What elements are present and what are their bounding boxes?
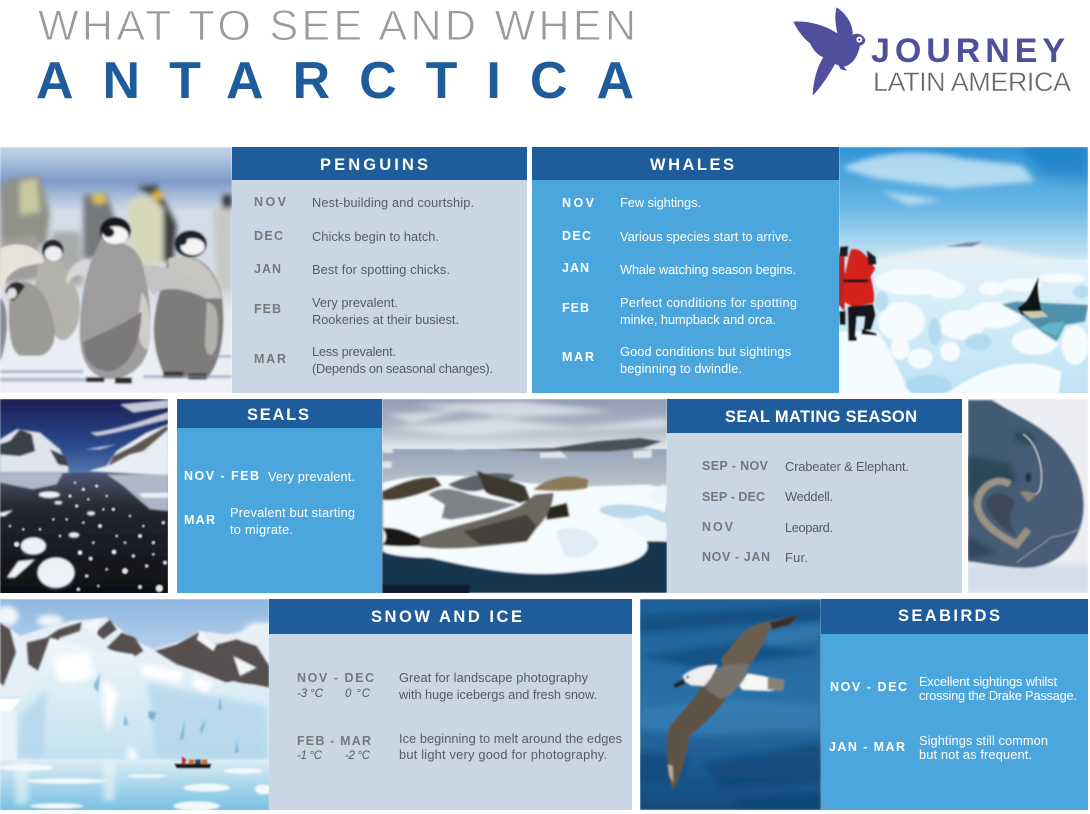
right flipper of main chick	[142, 265, 208, 299]
mating months and species: SEP - DEC	[702, 490, 765, 504]
whale months and notes: Good conditions but sightings	[620, 344, 791, 359]
photographer	[838, 257, 845, 312]
heading: snow and ice: SNOW AND ICE	[371, 608, 522, 626]
photo: iceberg	[0, 599, 277, 811]
right penguin	[154, 256, 223, 378]
far chick	[35, 257, 80, 340]
seal months and notes: to migrate.	[230, 522, 293, 537]
penguin months and notes: NOV	[254, 195, 287, 209]
mating months and species: NOV	[702, 520, 734, 534]
panel: seals	[177, 399, 382, 593]
photo: mountains and black water	[0, 399, 168, 594]
mating months and species: Weddell.	[785, 489, 833, 504]
snow and ice months, temperatures and notes: FEB - MAR	[297, 734, 371, 748]
icon: parrot	[793, 7, 865, 96]
heading: penguins	[232, 147, 527, 180]
penguin months and notes	[254, 195, 493, 376]
seabird months and notes: Excellent sightings whilst	[919, 674, 1057, 689]
photo: seal face	[967, 399, 1090, 593]
left small chick	[9, 282, 55, 356]
seabird months and notes: but not as frequent.	[919, 747, 1032, 762]
snow and ice months, temperatures and notes: NOV - DEC	[297, 671, 374, 685]
penguin months and notes: Rookeries at their busiest.	[312, 312, 459, 327]
penguin months and notes: (Depends on seasonal changes).	[312, 361, 493, 376]
seabird months and notes: crossing the Drake Passage.	[919, 688, 1077, 703]
snow and ice months, temperatures and notes: 0 °C	[345, 688, 371, 700]
mating months and species: Fur.	[785, 550, 808, 565]
whale months and notes: minke, humpback and orca.	[620, 312, 776, 327]
mating months and species: Leopard.	[785, 520, 833, 535]
photo: albatross over the sea	[640, 599, 821, 810]
whale months and notes: DEC	[562, 229, 591, 243]
panel: seabirds	[821, 599, 1088, 810]
panel: seal mating season	[667, 399, 962, 593]
title	[36, 2, 636, 110]
logo words: Latin America: LATIN AMERICA	[873, 67, 1071, 97]
title line: Antarctica: ANTARCTICA	[36, 52, 634, 110]
mating months and species: SEP - NOV	[702, 459, 769, 473]
seabird months and notes	[829, 674, 1077, 762]
whale months and notes: MAR	[562, 350, 594, 364]
seal months and notes	[184, 469, 355, 537]
photo: seals on ice floe	[382, 399, 667, 595]
penguin months and notes: JAN	[254, 262, 281, 276]
snow and ice months, temperatures and notes: with huge icebergs and fresh snow.	[398, 687, 597, 702]
heading: seals: SEALS	[247, 406, 309, 424]
snow and ice months, temperatures and notes: -1 °C	[297, 750, 323, 762]
whale months and notes: Whale watching season begins.	[620, 262, 796, 277]
heading: seabirds: SEABIRDS	[898, 607, 1000, 625]
photo: orca and photographer	[838, 145, 1090, 395]
whale months and notes: FEB	[562, 301, 589, 315]
seabird months and notes: JAN - MAR	[829, 740, 905, 754]
penguin months and notes: Best for spotting chicks.	[312, 262, 450, 277]
main chick	[80, 238, 151, 379]
logo: Journey Latin America	[793, 7, 1071, 97]
penguin months and notes: FEB	[254, 302, 281, 316]
heading: snow and ice	[269, 599, 632, 634]
penguin months and notes: Very prevalent.	[312, 295, 398, 310]
mating months and species	[702, 459, 909, 565]
snow and ice months, temperatures and notes: Ice beginning to melt around the edges	[399, 731, 622, 746]
penguin months and notes: Nest-building and courtship.	[312, 195, 474, 210]
penguin months and notes: DEC	[254, 229, 283, 243]
seal months and notes: Very prevalent.	[268, 469, 355, 484]
logo word: Journey: JOURNEY	[871, 32, 1065, 70]
mating months and species: Crabeater & Elephant.	[785, 459, 909, 474]
whale months and notes: Few sightings.	[620, 195, 701, 210]
snow and ice months, temperatures and notes	[297, 670, 622, 762]
whale months and notes: beginning to dwindle.	[620, 361, 742, 376]
heading: seal mating season	[667, 399, 962, 433]
whale months and notes: Perfect conditions for spotting	[620, 295, 797, 310]
seal months and notes: NOV - FEB	[184, 469, 259, 483]
heading: whales: WHALES	[650, 156, 734, 174]
left flipper	[0, 244, 44, 295]
heading: seal mating season: SEAL MATING SEASON	[725, 408, 917, 426]
whale months and notes: Various species start to arrive.	[620, 229, 792, 244]
seal months and notes: Prevalent but starting	[230, 505, 355, 520]
panel: penguins	[232, 147, 527, 393]
photo: penguins	[0, 147, 232, 393]
snow and ice months, temperatures and notes: but light very good for photography.	[399, 747, 607, 762]
title line: what to see and when: WHAT TO SEE AND WHEN	[38, 2, 636, 50]
heading: whales	[532, 147, 839, 180]
heading: seabirds	[821, 599, 1088, 634]
seabird months and notes: NOV - DEC	[830, 680, 907, 694]
whale months and notes: JAN	[562, 261, 589, 275]
penguin months and notes: Less prevalent.	[312, 344, 396, 359]
penguin months and notes: MAR	[254, 352, 286, 366]
snow and ice months, temperatures and notes: -2 °C	[345, 750, 371, 762]
seal months and notes: MAR	[184, 513, 215, 527]
heading: seals	[177, 399, 382, 428]
whale months and notes: NOV	[562, 196, 595, 210]
penguin months and notes: Chicks begin to hatch.	[312, 229, 439, 244]
snow and ice months, temperatures and notes: Great for landscape photography	[399, 670, 589, 685]
seabird months and notes: Sightings still common	[919, 733, 1048, 748]
whale months and notes	[562, 195, 797, 376]
snow and ice months, temperatures and notes: -3 °C	[297, 688, 324, 700]
mating months and species: NOV - JAN	[702, 550, 770, 564]
panel: snow and ice	[269, 599, 632, 810]
heading: penguins: PENGUINS	[320, 156, 428, 174]
panel: whales	[532, 147, 839, 393]
